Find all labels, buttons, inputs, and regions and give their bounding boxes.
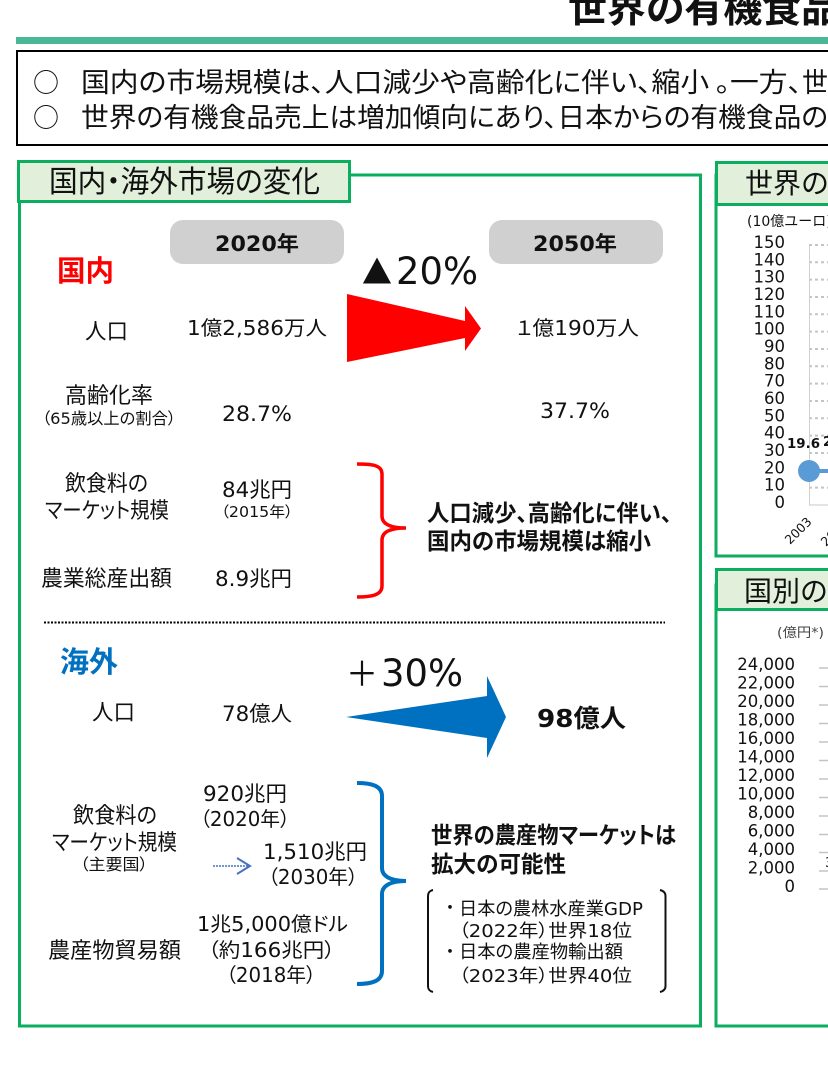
domestic heading: 国内: [57, 248, 114, 290]
summary box: [17, 51, 828, 145]
world food market row: （2020年）: [200, 807, 290, 831]
overseas population row: 98億人: [537, 704, 626, 733]
summary box: ○: [33, 63, 59, 100]
y axis labels: 60: [764, 389, 785, 408]
y axis labels: 20: [764, 458, 785, 477]
overseas population row: [92, 695, 626, 733]
panel: world organic sales: [716, 162, 828, 556]
food market size row: [45, 466, 293, 525]
summary box: 国内の市場規模は、人口減少や高齢化に伴い、縮小 。一方、: [81, 61, 802, 100]
overseas conclusion: [431, 816, 676, 879]
brace: red: [357, 464, 406, 597]
y axis labels: 40: [764, 424, 785, 443]
y axis labels: 8,000: [748, 803, 795, 822]
y axis labels: 90: [764, 337, 785, 356]
title underline bar: [16, 37, 828, 44]
world food market row: （2030年）: [268, 865, 358, 889]
arrow: blue: [346, 676, 506, 758]
y axis labels: 70: [764, 372, 785, 391]
year badge 2050: 2050年: [533, 232, 617, 256]
year badge 2050: [489, 220, 663, 264]
agricultural trade row: 農産物貿易額: [48, 933, 181, 965]
y axis labels: 0: [784, 877, 795, 896]
y axis labels: [754, 233, 785, 512]
brace: blue: [357, 783, 406, 984]
domestic population row: [85, 314, 639, 346]
change label: minus 20 percent: [362, 248, 478, 294]
bracketed note: Japan rankings: 日本の農林水産業GDP: [459, 899, 643, 920]
year badge 2020: [170, 220, 344, 264]
panel: domestic and overseas markets: [18, 157, 700, 1026]
panel heading: 国内・海外市場の変化: [49, 157, 320, 201]
overseas heading: 海外: [60, 639, 118, 681]
change label: plus 30 percent: ＋: [346, 647, 378, 696]
y axis labels: 140: [754, 250, 785, 269]
y axis labels: 110: [754, 302, 785, 321]
y axis labels: 14,000: [737, 748, 795, 766]
line chart: 2003: [782, 514, 815, 547]
year badge 2020: 2020年: [215, 232, 299, 256]
ageing rate row: 28.7%: [222, 402, 292, 426]
overseas population row: 78億人: [222, 702, 292, 726]
agricultural trade row: 1兆5,000億ドル: [197, 912, 348, 936]
agricultural output row: 8.9兆円: [215, 567, 292, 591]
agricultural trade row: （約166兆円）: [208, 938, 335, 962]
change label: minus 20 percent: ▲: [362, 248, 392, 294]
world food market row: 1,510兆円: [263, 840, 367, 864]
agricultural trade row: （2018年）: [226, 963, 316, 987]
change label: plus 30 percent: [346, 647, 463, 696]
y axis labels: 130: [754, 268, 785, 287]
y axis labels: 30: [764, 441, 785, 460]
ageing rate row: [42, 378, 610, 428]
world food market row: マーケット規模: [52, 825, 177, 857]
y axis labels: 0: [774, 493, 785, 512]
domestic population row: １億190万人: [516, 316, 639, 340]
domestic conclusion: 人口減少、高齢化に伴い、: [427, 494, 672, 528]
food market size row: 飲食料の: [65, 466, 148, 498]
data point 2003: [798, 460, 820, 482]
bar chart axis: (億円*): [777, 626, 824, 641]
y axis labels: 4,000: [748, 840, 795, 859]
y axis labels: 12,000: [737, 766, 795, 785]
bar chart axis: [737, 626, 828, 896]
ageing rate row: 37.7%: [540, 399, 610, 423]
bracketed note: Japan rankings: 日本の農産物輸出額: [459, 942, 623, 963]
world food market row: 飲食料の: [73, 798, 157, 830]
world food market row: [52, 782, 367, 889]
y axis labels: 50: [764, 406, 785, 425]
bracketed note: Japan rankings: ・: [441, 894, 459, 920]
domestic population row: 1億2,586万人: [187, 316, 327, 340]
world food market row: （主要国）: [80, 851, 148, 875]
agricultural output row: [41, 561, 292, 593]
overseas conclusion: 世界の農産物マーケットは: [431, 816, 676, 850]
overseas conclusion: 拡大の可能性: [431, 845, 566, 879]
y axis labels: 18,000: [737, 710, 795, 730]
line chart: [747, 214, 828, 549]
overseas population row: 人口: [92, 695, 135, 727]
y axis labels: 24,000: [737, 655, 795, 674]
y axis labels: 22,000: [737, 674, 795, 692]
bracketed note: Japan rankings: ・: [441, 938, 459, 964]
food market size row: （2015年）: [221, 503, 293, 521]
y axis labels: 2,000: [748, 858, 795, 878]
agricultural output row: 農業総産出額: [41, 561, 172, 593]
summary box: ○: [33, 98, 59, 135]
y axis labels: 20,000: [737, 692, 795, 711]
food market size row: 84兆円: [222, 478, 292, 502]
change label: plus 30 percent: 30%: [381, 652, 463, 695]
domestic conclusion: 国内の市場規模は縮小: [427, 522, 651, 556]
summary box: 世界の有機食品売上は増加傾向にあり、日本からの有機食品の: [81, 96, 828, 135]
y axis labels: 150: [754, 233, 785, 252]
panel: sales by country: [716, 570, 828, 1026]
bracketed note: Japan rankings: （2022年）世界18位: [459, 921, 632, 942]
domestic conclusion: [427, 494, 672, 556]
y axis labels: 10: [764, 476, 785, 495]
line chart: 19.6: [787, 437, 820, 452]
y axis labels: 80: [764, 354, 785, 373]
arrow: red: [347, 294, 481, 362]
agricultural trade row: [48, 912, 348, 987]
bracketed note: Japan rankings: （2023年）世界40位: [459, 966, 632, 987]
y axis labels: 10,000: [737, 784, 795, 804]
ageing rate row: 高齢化率: [65, 378, 153, 410]
change label: minus 20 percent: 20%: [396, 250, 478, 293]
bracketed note: Japan rankings: [428, 890, 666, 992]
ageing rate row: （65歳以上の割合）: [42, 409, 176, 428]
y axis labels: 120: [754, 285, 785, 304]
y axis labels: 100: [754, 320, 785, 339]
arrow: dotted growth: [213, 858, 250, 874]
y axis labels: 16,000: [737, 729, 795, 748]
y axis labels: [737, 655, 795, 896]
world food market row: 920兆円: [203, 782, 287, 806]
domestic population row: 人口: [85, 314, 128, 346]
y axis labels: 6,000: [748, 822, 795, 840]
food market size row: マーケット規模: [45, 493, 169, 525]
